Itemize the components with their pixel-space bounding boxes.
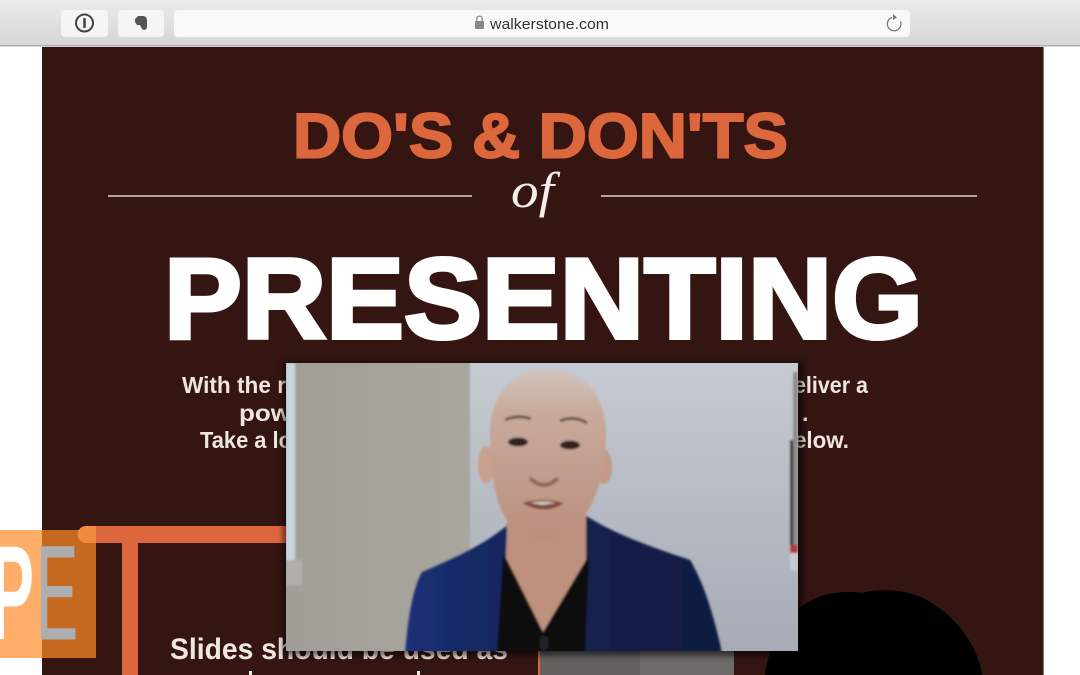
brows <box>505 417 587 423</box>
eyes <box>508 438 528 446</box>
shirt <box>497 555 589 653</box>
title: do's and don'ts: DO'S & DON'TS <box>293 102 788 172</box>
head <box>489 370 607 520</box>
intro paragraph, partly hidden by video <box>182 372 868 453</box>
intro paragraph, partly hidden by video: . <box>802 400 808 426</box>
intro paragraph, partly hidden by video: eliver a <box>794 372 868 398</box>
url: walkerstone.com <box>489 16 609 33</box>
browser toolbar <box>0 0 1080 46</box>
presenter <box>405 370 722 653</box>
intro paragraph, partly hidden by video: Take a lo <box>200 427 292 453</box>
password manager button <box>61 10 108 37</box>
jacket <box>405 515 722 653</box>
intro paragraph, partly hidden by video: elow. <box>794 427 849 453</box>
lock icon <box>475 16 484 29</box>
blurred transition letters overlay: E <box>36 519 78 668</box>
ears <box>478 446 494 484</box>
silhouette head <box>765 590 982 675</box>
video shadow <box>283 362 803 656</box>
intro paragraph, partly hidden by video: With the r <box>182 372 286 398</box>
slide text: Slides should be used as <box>170 633 508 666</box>
mouth <box>522 500 564 510</box>
grey panel below video <box>538 651 734 675</box>
reload icon <box>887 14 901 31</box>
lapel microphone <box>540 636 548 650</box>
intro paragraph, partly hidden by video: pow <box>239 400 291 426</box>
title divider with of: of <box>511 162 561 218</box>
orange t-shaped connector <box>86 526 298 675</box>
neck <box>506 495 586 632</box>
address bar <box>174 10 910 37</box>
video of presenter <box>284 361 800 653</box>
nose <box>530 478 558 485</box>
room background <box>284 361 800 653</box>
title: presenting: PRESENTING <box>164 236 923 363</box>
evernote button <box>118 10 164 37</box>
